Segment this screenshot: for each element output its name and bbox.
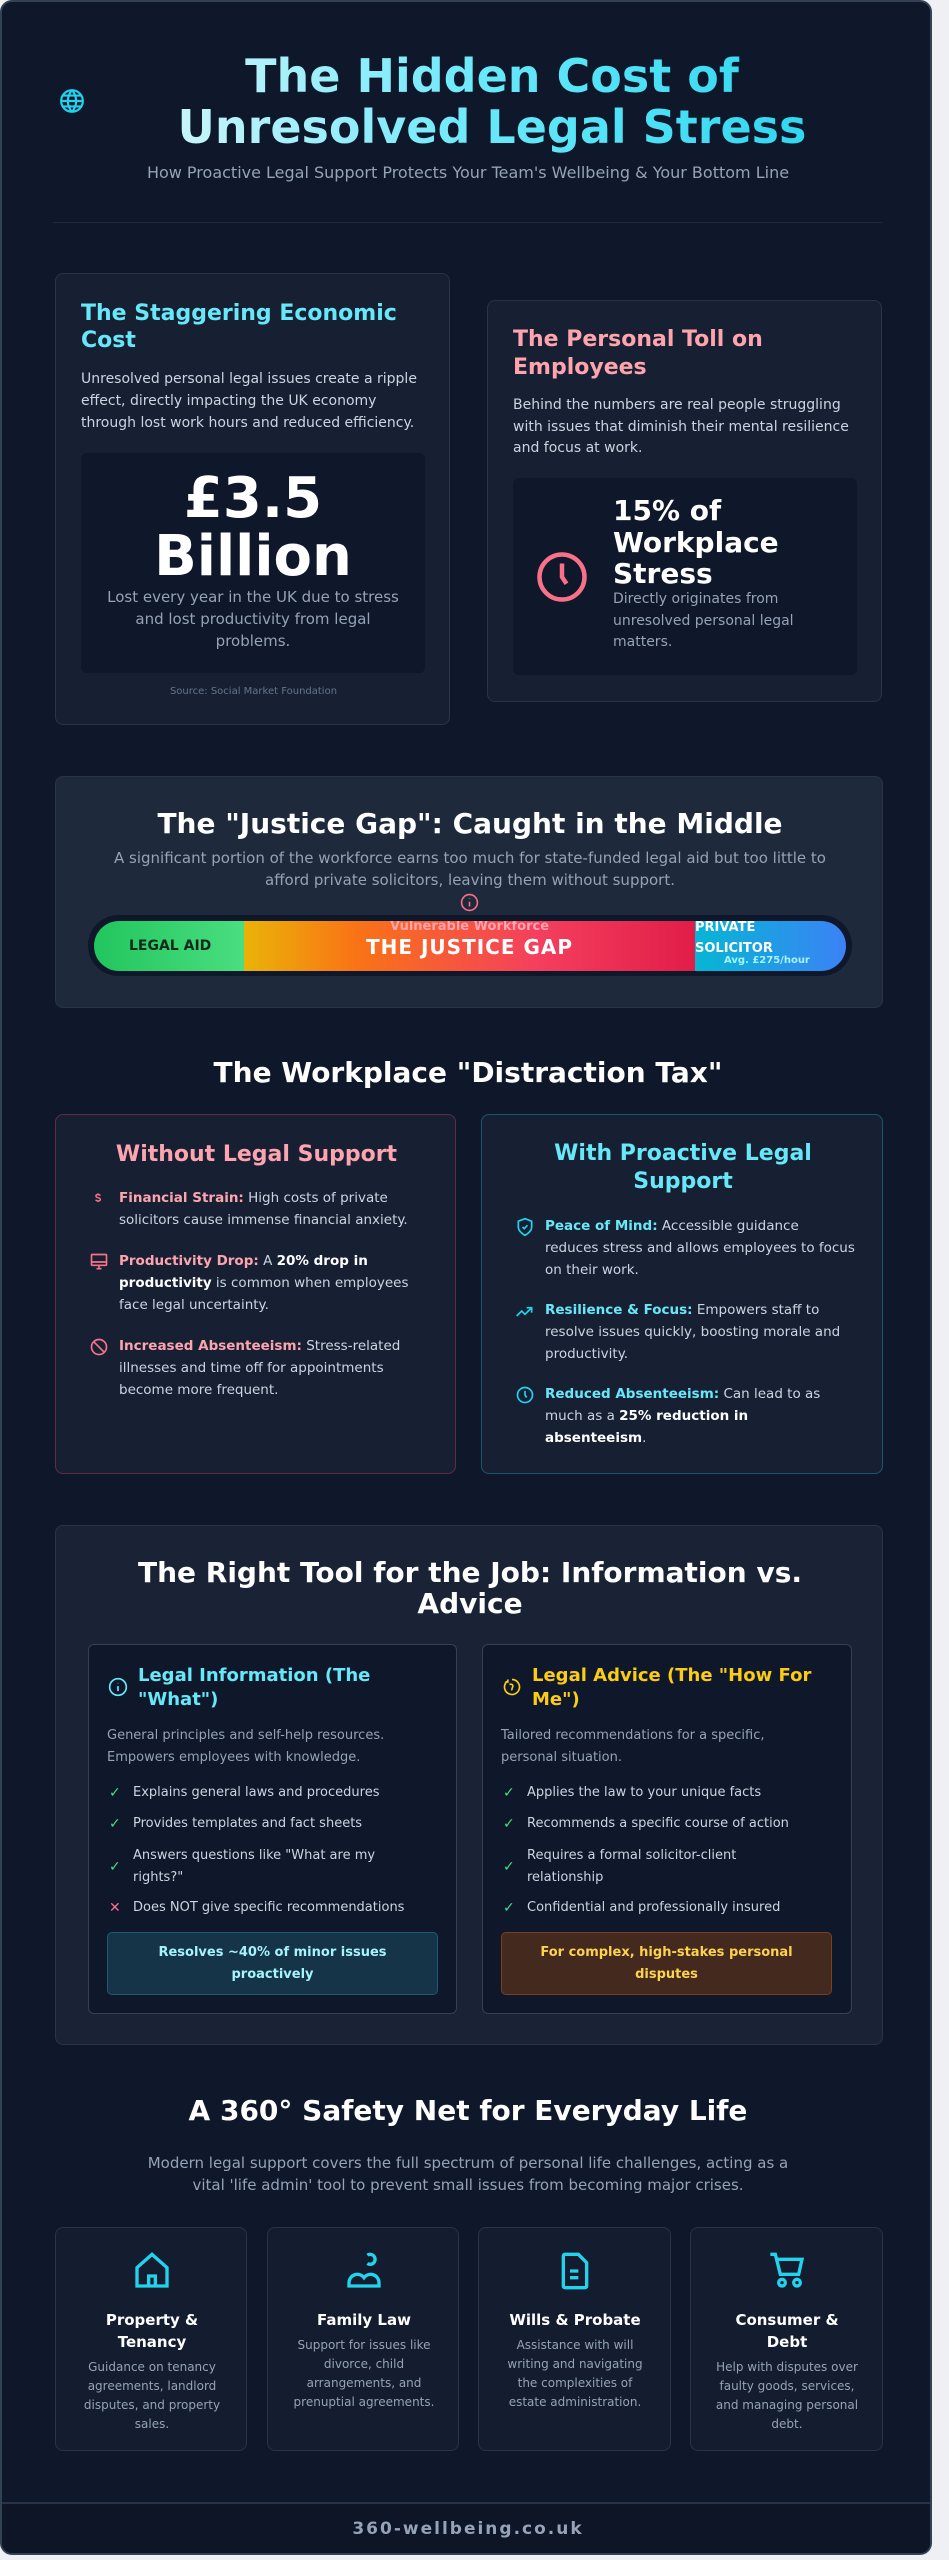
panel: information vs advice bbox=[55, 1525, 883, 2045]
item: reduced absenteeism: absenteeism. bbox=[545, 1430, 646, 1446]
panel: family law: Family Law bbox=[317, 2311, 411, 2329]
list: advice points: Requires a formal solicitor-client bbox=[527, 1848, 736, 1863]
item: reduced absenteeism bbox=[516, 1386, 820, 1446]
item: reduced absenteeism: much as a 25% reduction in bbox=[545, 1408, 748, 1424]
text: information description: Empowers employees with knowledge. bbox=[107, 1750, 360, 1765]
panel: consumer & debt: and managing personal bbox=[716, 2398, 858, 2412]
segment: private solicitor: SOLICITOR bbox=[695, 941, 773, 956]
heading: with bbox=[554, 1141, 812, 1194]
heading: legal information bbox=[138, 1665, 370, 1710]
heading: safety net: A 360° Safety Net for Everyday Life bbox=[189, 2094, 747, 2127]
panel: family law: prenuptial agreements. bbox=[294, 2395, 434, 2409]
stat: 15% workplace stress: Stress bbox=[613, 557, 713, 590]
heading: personal toll: Employees bbox=[513, 355, 647, 380]
panel: legal information: ✕ bbox=[109, 1900, 121, 1916]
stat: 3.5 billion: Lost every year in the UK due to stress and lost productivity from legal problems. bbox=[107, 588, 399, 650]
list: advice points bbox=[503, 1785, 789, 1916]
panel: economic cost bbox=[55, 273, 450, 725]
panel: wills & probate: Assistance with will bbox=[517, 2338, 633, 2352]
panel: legal information bbox=[88, 1644, 457, 2014]
panel: legal information: ✓ bbox=[109, 1816, 121, 1832]
panel: legal advice: ✓ bbox=[503, 1859, 515, 1875]
icon: cart bbox=[770, 2252, 804, 2288]
panel: property & tenancy: disputes, and property bbox=[84, 2398, 220, 2412]
segment: private solicitor bbox=[695, 921, 846, 971]
source: Source: Social Market Foundation bbox=[170, 686, 337, 697]
heading: distraction tax: The Workplace "Distraction Tax" bbox=[214, 1056, 722, 1089]
text: justice description: A significant portion of the workforce earns too much for state-funded legal aid but too little to bbox=[114, 849, 826, 867]
list: information points: Explains general laws and procedures bbox=[133, 1785, 379, 1800]
panel: property & tenancy: sales. bbox=[135, 2417, 169, 2431]
panel: wills & probate: the complexities of bbox=[518, 2376, 632, 2390]
heading: legal advice bbox=[532, 1665, 812, 1710]
panel: consumer & debt bbox=[690, 2227, 883, 2451]
text: information description: General principles and self-help resources. bbox=[107, 1728, 384, 1743]
callout: complex disputes: disputes bbox=[635, 1967, 698, 1982]
item: peace of mind: reduces stress and allows employees to focus on their work. bbox=[545, 1240, 855, 1278]
panel: family law bbox=[267, 2227, 459, 2451]
segment: the justice gap bbox=[244, 921, 695, 971]
icon: document bbox=[562, 2252, 588, 2290]
text: advice description bbox=[500, 1728, 764, 1765]
stat: 15% workplace stress bbox=[513, 478, 857, 675]
panel: justice gap bbox=[55, 776, 883, 1008]
footer: 360-wellbeing.co.uk bbox=[352, 2519, 584, 2539]
heading: without: Without Legal Support bbox=[116, 1142, 397, 1167]
text: information description bbox=[107, 1728, 384, 1765]
text: justice description bbox=[114, 849, 826, 889]
item: reduced absenteeism: Reduced Absenteeism: Can lead to as bbox=[545, 1386, 820, 1402]
item: increased absenteeism: Increased Absenteeism: Stress-related illnesses and time off for appointments become more frequent. bbox=[119, 1338, 400, 1398]
item: resilience & focus: resolve issues quickly, boosting morale and productivity. bbox=[545, 1324, 840, 1362]
panel: consumer & debt: Debt bbox=[767, 2333, 807, 2351]
heading: personal toll: The Personal Toll on bbox=[513, 327, 763, 352]
panel: legal advice bbox=[482, 1644, 852, 2014]
panel: consumer & debt: Help with disputes over bbox=[716, 2360, 858, 2374]
stat: 3.5 billion: £3.5 bbox=[184, 466, 322, 531]
list: information points bbox=[109, 1785, 404, 1916]
stat: 15% workplace stress: Directly originates from unresolved personal legal matters. bbox=[613, 591, 794, 650]
item: peace of mind bbox=[518, 1218, 855, 1278]
panel: consumer & debt: Consumer & bbox=[735, 2311, 839, 2329]
panel: legal advice: ✓ bbox=[503, 1785, 515, 1801]
panel: legal information: ✓ bbox=[109, 1785, 121, 1801]
list: information points: Answers questions like "What are my bbox=[133, 1848, 375, 1863]
panel: legal advice: ✓ bbox=[503, 1900, 515, 1916]
bar: justice gap spectrum bbox=[88, 915, 852, 976]
heading: legal advice: Me") bbox=[532, 1689, 580, 1710]
heading: right tool bbox=[138, 1556, 802, 1620]
text: safety net description: Modern legal support covers the full spectrum of personal life challenges, acting as a bbox=[148, 2154, 788, 2172]
panel: consumer & debt: faulty goods, services, bbox=[720, 2379, 854, 2393]
item: resilience & focus: Resilience & Focus: Empowers staff to bbox=[545, 1302, 819, 1318]
list: information points: Provides templates and fact sheets bbox=[133, 1816, 362, 1831]
item: productivity drop: Productivity Drop: A 20% drop in productivity is common when employees face legal uncertainty. bbox=[119, 1253, 409, 1313]
callout: complex disputes bbox=[501, 1932, 832, 1995]
segment: private solicitor: Avg. £275/hour bbox=[724, 955, 810, 966]
text: economic description: Unresolved personal legal issues create a ripple effect, directly impacting the UK economy through lost work hours and reduced efficiency. bbox=[81, 371, 417, 431]
heading: legal information: Legal Information (The bbox=[138, 1665, 370, 1686]
list: advice points: Confidential and professionally insured bbox=[527, 1900, 780, 1915]
callout: resolves 40%: proactively bbox=[231, 1967, 314, 1982]
panel: consumer & debt: debt. bbox=[771, 2417, 803, 2431]
text: justice description: afford private solicitors, leaving them without support. bbox=[265, 871, 675, 889]
icon: house bbox=[135, 2252, 169, 2288]
stat: 15% workplace stress: Workplace bbox=[613, 526, 779, 558]
panel: wills & probate: Wills & Probate bbox=[509, 2311, 641, 2329]
panel: wills & probate bbox=[478, 2227, 671, 2451]
icon: info bbox=[108, 1678, 128, 1696]
icon: family bbox=[347, 2252, 381, 2288]
icon: clock bbox=[537, 552, 587, 602]
list: advice points: Applies the law to your unique facts bbox=[527, 1785, 761, 1800]
list: advice points: Recommends a specific course of action bbox=[527, 1816, 789, 1831]
icon: advice bbox=[504, 1678, 520, 1696]
heading: with: Support bbox=[633, 1169, 733, 1194]
icon: info bbox=[460, 894, 478, 912]
heading: economic cost: Cost bbox=[81, 328, 136, 353]
panel: wills & probate: estate administration. bbox=[509, 2395, 641, 2409]
list: information points: rights?" bbox=[133, 1870, 183, 1885]
heading: economic cost: The Staggering Economic bbox=[81, 301, 397, 326]
subtitle: How Proactive Legal Support Protects Your Team's Wellbeing & Your Bottom Line bbox=[147, 163, 789, 182]
item: financial strain: Financial Strain: High costs of private solicitors cause immense financial anxiety. bbox=[119, 1190, 408, 1228]
heading: right tool: Advice bbox=[417, 1587, 523, 1620]
panel: property & tenancy: Property & bbox=[106, 2311, 198, 2329]
title: Unresolved Legal Stress bbox=[178, 100, 806, 154]
segment: the justice gap: THE JUSTICE GAP bbox=[366, 935, 573, 959]
panel: family law: divorce, child bbox=[324, 2357, 404, 2371]
heading: personal toll bbox=[513, 327, 763, 380]
heading: with: With Proactive Legal bbox=[554, 1141, 812, 1166]
callout: complex disputes: For complex, high-stakes personal bbox=[540, 1945, 793, 1960]
text: advice description: personal situation. bbox=[501, 1750, 622, 1765]
text: advice description: Tailored recommendations for a specific, bbox=[501, 1728, 764, 1743]
panel: personal toll bbox=[487, 300, 882, 702]
heading: justice gap: The "Justice Gap": Caught in the Middle bbox=[157, 807, 783, 840]
stat: 3.5 billion bbox=[81, 453, 425, 673]
heading: legal advice: Legal Advice (The "How For bbox=[532, 1665, 811, 1686]
title: The Hidden Cost of bbox=[245, 49, 739, 103]
heading: economic cost bbox=[81, 301, 397, 353]
segment: legal aid bbox=[94, 921, 244, 971]
list: advice points: relationship bbox=[527, 1870, 603, 1885]
text: safety net description bbox=[148, 2154, 788, 2194]
panel: legal advice: ✓ bbox=[503, 1816, 515, 1832]
panel: property & tenancy bbox=[55, 2227, 247, 2451]
item: peace of mind: Peace of Mind: Accessible guidance bbox=[545, 1218, 799, 1234]
panel: legal information: ✓ bbox=[109, 1859, 121, 1875]
panel: with proactive legal support bbox=[481, 1114, 883, 1474]
title bbox=[102, 51, 882, 153]
panel: wills & probate: writing and navigating bbox=[507, 2357, 643, 2371]
stat: 15% workplace stress: 15% of bbox=[613, 494, 721, 527]
icon: globe bbox=[60, 89, 84, 113]
list: information points: Does NOT give specific recommendations bbox=[133, 1900, 404, 1915]
segment: legal aid: LEGAL AID bbox=[129, 938, 211, 954]
footer bbox=[2, 2502, 934, 2557]
panel: property & tenancy: Guidance on tenancy bbox=[88, 2360, 216, 2374]
item: resilience & focus bbox=[516, 1302, 840, 1362]
stat: 3.5 billion: Billion bbox=[154, 524, 352, 589]
callout: resolves 40%: Resolves ~40% of minor issues bbox=[158, 1945, 387, 1960]
panel: family law: arrangements, and bbox=[307, 2376, 421, 2390]
panel: family law: Support for issues like bbox=[297, 2338, 431, 2352]
callout: resolves 40% bbox=[107, 1932, 438, 1995]
heading: legal information: "What") bbox=[138, 1689, 218, 1710]
panel: without legal support bbox=[55, 1114, 456, 1474]
heading: right tool: The Right Tool for the Job: Information vs. bbox=[138, 1556, 802, 1589]
panel: property & tenancy: Tenancy bbox=[118, 2333, 186, 2351]
text: personal description: Behind the numbers are real people struggling with issues that diminish their mental resilience and focus at work. bbox=[513, 397, 849, 456]
panel: property & tenancy: agreements, landlord bbox=[88, 2379, 216, 2393]
text: safety net description: vital 'life admin' tool to prevent small issues from becoming major crises. bbox=[192, 2176, 744, 2194]
